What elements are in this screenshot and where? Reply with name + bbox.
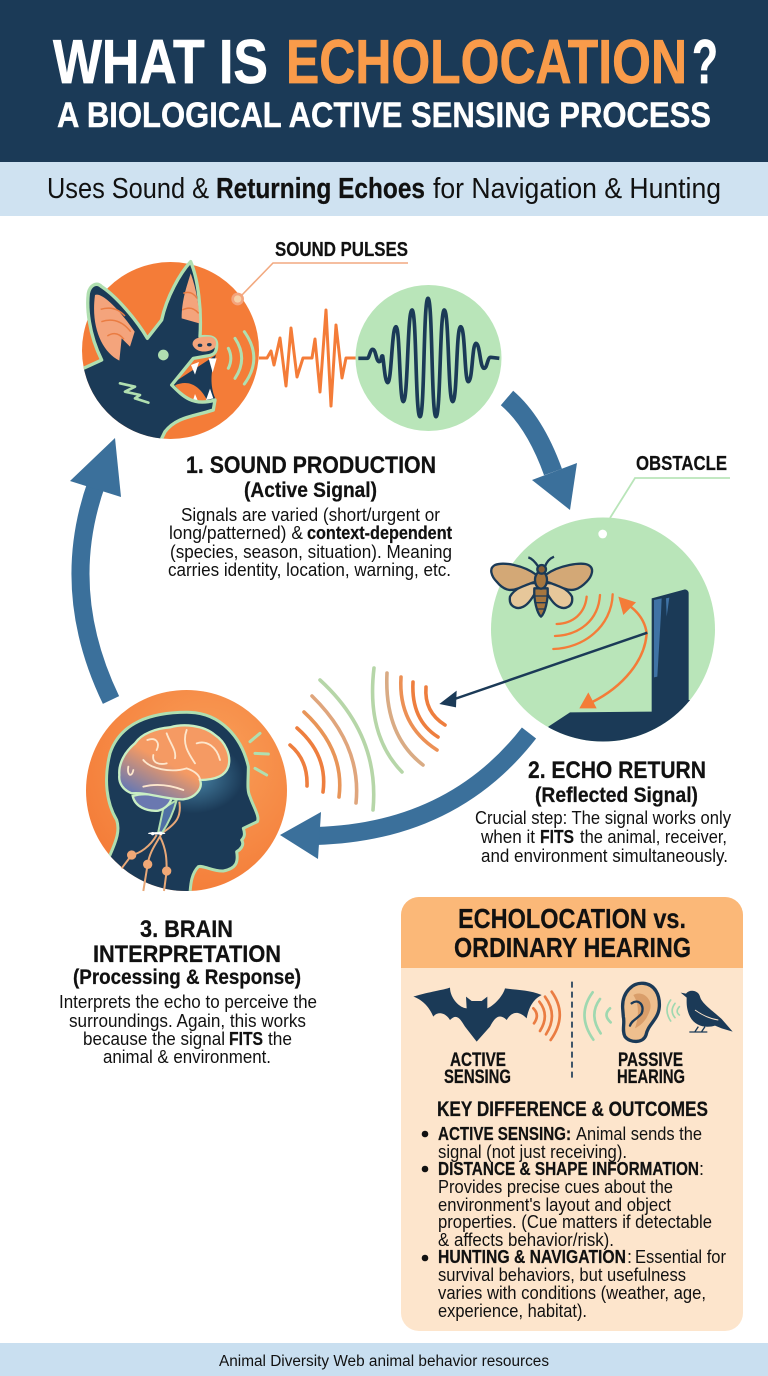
step 3 body: because the signal bbox=[83, 1029, 225, 1049]
label: passive hearing: PASSIVE bbox=[618, 1050, 683, 1071]
tagline band bbox=[0, 162, 768, 216]
panel heading bbox=[454, 903, 691, 963]
step 2 body bbox=[475, 808, 731, 866]
icon: active waves bbox=[533, 992, 560, 1040]
obstacle label: OBSTACLE bbox=[636, 453, 727, 475]
step 3 body: FITS bbox=[229, 1029, 263, 1049]
bat teeth bbox=[191, 358, 217, 403]
panel heading: ECHOLOCATION vs. bbox=[458, 903, 686, 934]
step 3 heading: 3. BRAIN bbox=[140, 916, 233, 943]
wall and ground bbox=[548, 589, 690, 742]
tagline band: Uses Sound & bbox=[47, 173, 209, 205]
label: passive hearing bbox=[617, 1050, 685, 1088]
bat eye bbox=[158, 350, 169, 360]
bullet: active sensing bbox=[422, 1124, 702, 1162]
key difference heading: KEY DIFFERENCE & OUTCOMES bbox=[437, 1098, 708, 1121]
bullet: hunting and navigation: : bbox=[627, 1247, 632, 1267]
bullet: distance and shape: & affects behavior/risk). bbox=[438, 1230, 614, 1250]
step 3 body bbox=[59, 992, 317, 1067]
header banner bbox=[0, 0, 768, 162]
step 1 body: long/patterned) & bbox=[169, 523, 303, 543]
title: ? bbox=[692, 28, 718, 97]
arrow: echo to brain bbox=[280, 733, 529, 859]
step 3 body: Interprets the echo to perceive the bbox=[59, 992, 317, 1012]
step 1 heading: 1. SOUND PRODUCTION bbox=[186, 452, 436, 479]
title: WHAT IS bbox=[53, 28, 268, 97]
step 2 body: when it bbox=[480, 827, 535, 847]
cerebellum bbox=[133, 794, 172, 811]
bat mouth bbox=[174, 355, 216, 400]
step 2 body: FITS bbox=[540, 827, 574, 847]
icons: active vs passive bbox=[413, 982, 733, 1078]
sound pulses label bbox=[241, 239, 408, 296]
panel heading: ORDINARY HEARING bbox=[454, 932, 691, 963]
obstacle label bbox=[610, 453, 730, 518]
bullet: hunting and navigation: HUNTING & NAVIGATION bbox=[438, 1247, 626, 1267]
step 3 text bbox=[59, 916, 317, 1067]
step 2 subheading: (Reflected Signal) bbox=[535, 784, 698, 807]
orange sound wave bbox=[259, 310, 357, 406]
brain bbox=[119, 725, 229, 799]
step 1 body: context-dependent bbox=[307, 523, 452, 543]
icon: ear bbox=[623, 983, 659, 1041]
label: active sensing bbox=[444, 1050, 511, 1088]
step 2 heading: 2. ECHO RETURN bbox=[528, 757, 706, 784]
step 3 body: animal & environment. bbox=[103, 1047, 271, 1067]
moth bbox=[491, 557, 592, 617]
bullet: hunting and navigation bbox=[422, 1247, 726, 1321]
icon: bat silhouette bbox=[413, 988, 542, 1042]
bat tongue bbox=[175, 383, 207, 400]
brainstem bbox=[158, 800, 177, 833]
bullet: active sensing: Animal sends the bbox=[576, 1124, 702, 1144]
nerves bbox=[122, 802, 180, 891]
head silhouette bbox=[93, 712, 258, 893]
echo waves from moth bbox=[553, 594, 613, 649]
icon: passive waves bbox=[584, 992, 611, 1040]
bullet: hunting and navigation: varies with conditions (weather, age, bbox=[438, 1283, 706, 1303]
label: passive hearing: HEARING bbox=[617, 1067, 685, 1088]
icon: small waves bbox=[667, 1000, 679, 1021]
panel: echolocation vs ordinary hearing bbox=[401, 897, 743, 1331]
sparkle bbox=[148, 832, 165, 834]
label: active sensing: SENSING bbox=[444, 1067, 511, 1088]
insight marks bbox=[250, 733, 268, 775]
step 3 body: surroundings. Again, this works bbox=[69, 1011, 306, 1031]
icon: bird bbox=[681, 991, 733, 1032]
step 2 body: Crucial step: The signal works only bbox=[475, 808, 731, 828]
reflected arrows bbox=[592, 603, 647, 702]
bat head silhouette bbox=[73, 262, 217, 443]
step 1 body: carries identity, location, warning, etc. bbox=[168, 560, 451, 580]
icon: bat head circle bbox=[73, 262, 259, 443]
arrow: brain to production bbox=[70, 438, 121, 700]
returning signal arrow bbox=[452, 633, 647, 700]
footer bbox=[0, 1343, 768, 1376]
bullet: distance and shape: environment's layout and object bbox=[438, 1195, 671, 1215]
step 1 body bbox=[168, 505, 452, 580]
icon: obstacle circle with moth bbox=[439, 517, 720, 750]
step 1 subheading: (Active Signal) bbox=[244, 479, 377, 502]
echo arcs near obstacle bbox=[373, 668, 445, 772]
tagline band: for Navigation & Hunting bbox=[433, 173, 721, 205]
sound pulses label: SOUND PULSES bbox=[275, 239, 408, 261]
bat ears bbox=[94, 295, 135, 361]
divider bbox=[569, 982, 574, 1078]
step 3 heading: INTERPRETATION bbox=[93, 941, 281, 968]
bullet: active sensing: ACTIVE SENSING: bbox=[438, 1124, 571, 1144]
bullet: distance and shape: DISTANCE & SHAPE INFORMATION bbox=[438, 1159, 699, 1179]
step 1 body: Signals are varied (short/urgent or bbox=[181, 505, 440, 525]
bullet: active sensing: signal (not just receiving). bbox=[438, 1142, 627, 1162]
step 2 body: and environment simultaneously. bbox=[481, 846, 728, 866]
bullet: hunting and navigation: Essential for bbox=[635, 1247, 726, 1267]
label: active sensing: ACTIVE bbox=[450, 1050, 506, 1071]
step 3 body: the bbox=[268, 1029, 292, 1049]
step 2 body: the animal, receiver, bbox=[580, 827, 727, 847]
tagline band: Returning Echoes bbox=[216, 173, 425, 205]
footer: Animal Diversity Web animal behavior resources bbox=[219, 1353, 549, 1370]
bullet: hunting and navigation: experience, habitat). bbox=[438, 1301, 587, 1321]
bullet: hunting and navigation: survival behaviors, but usefulness bbox=[438, 1265, 686, 1285]
echo arcs near brain bbox=[290, 680, 374, 810]
step 2 text bbox=[475, 757, 731, 866]
icon: brain head circle bbox=[86, 690, 287, 893]
arrow: production to echo bbox=[507, 398, 577, 510]
step 1 text bbox=[168, 452, 452, 580]
bat nose bbox=[193, 337, 216, 352]
step 1 body: (species, season, situation). Meaning bbox=[170, 542, 452, 562]
icon: wave circle bbox=[356, 285, 502, 431]
step 3 heading bbox=[93, 916, 281, 968]
bullet: distance and shape bbox=[422, 1159, 712, 1250]
bullet: distance and shape: Provides precise cues about the bbox=[438, 1177, 673, 1197]
bullet: distance and shape: : bbox=[699, 1159, 704, 1179]
title bbox=[53, 28, 718, 97]
step 3 subheading: (Processing & Response) bbox=[73, 966, 301, 989]
bullet: distance and shape: properties. (Cue matters if detectable bbox=[438, 1212, 712, 1232]
